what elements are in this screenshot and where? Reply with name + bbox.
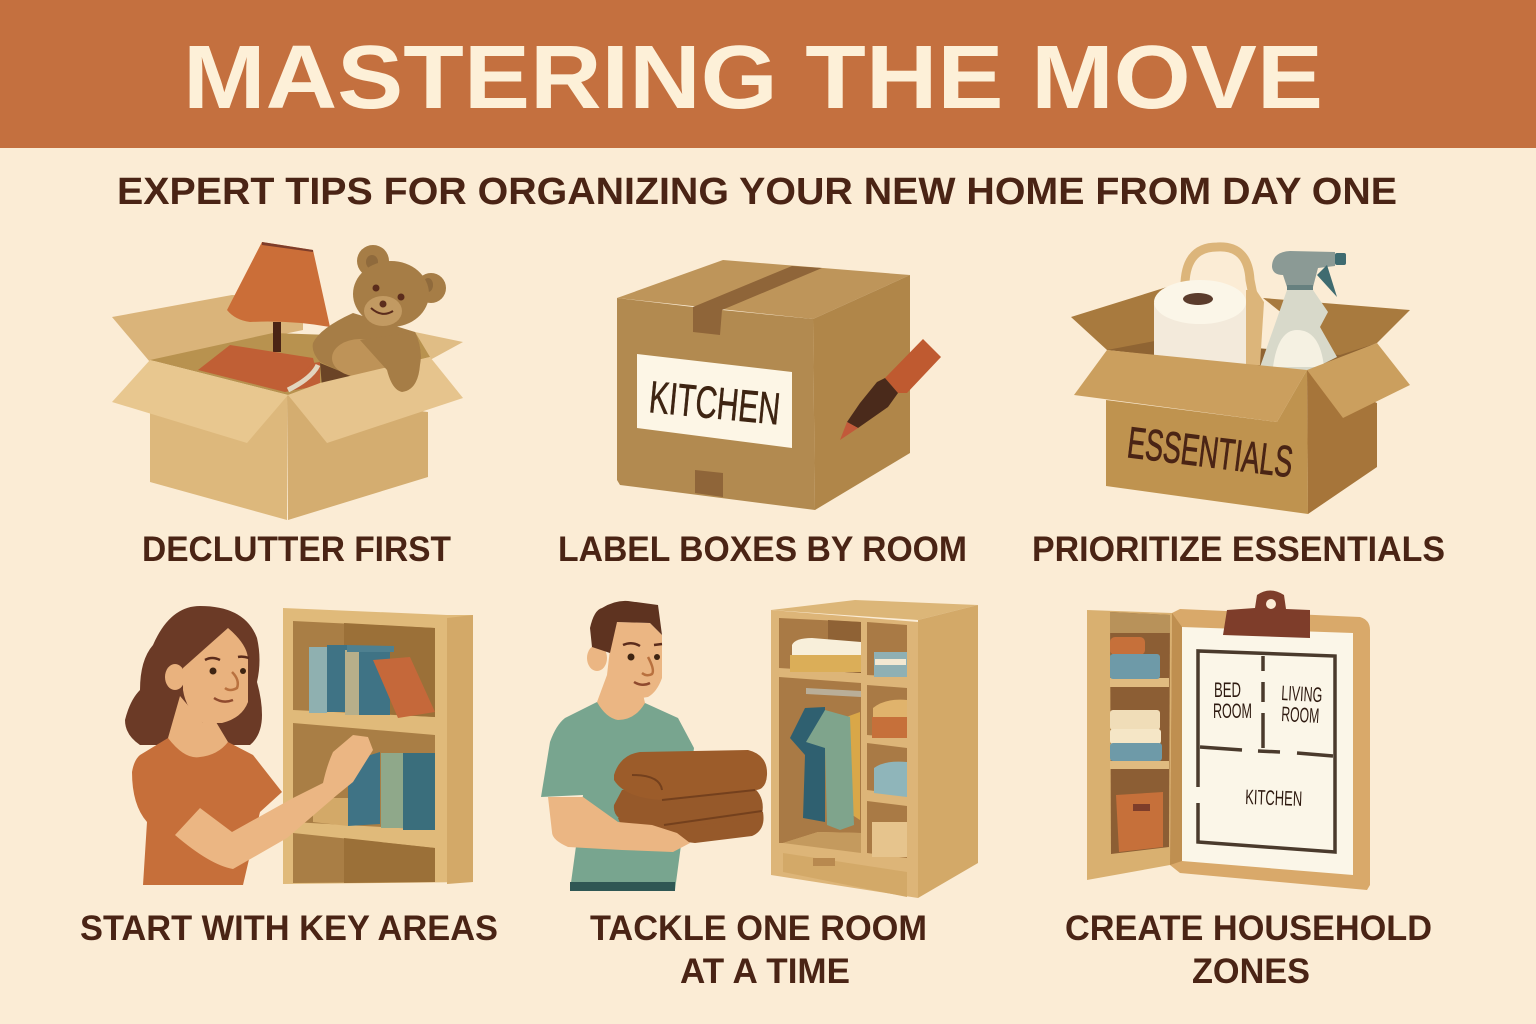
icon: man with towels [541,601,767,891]
box text: ESSENTIALS [1125,418,1296,487]
icon: woman [125,606,373,885]
teddy bear head and arm [353,245,446,392]
panel: tackle one room at a time [541,600,978,991]
label: CREATE HOUSEHOLD [1065,909,1432,948]
panel: start with key areas [80,606,498,948]
box label text: KITCHEN [647,371,782,435]
label: DECLUTTER FIRST [142,530,451,569]
icon: wardrobe [771,600,978,898]
icon: open box with lamp and teddy [112,242,463,520]
icon: clipboard with floor plan [1170,590,1370,890]
subtitle: EXPERT TIPS FOR ORGANIZING YOUR NEW HOME FROM DAY ONE [117,171,1397,213]
panel: prioritize essentials [1032,247,1445,569]
label: TACKLE ONE ROOM [590,909,927,948]
teddy bear body [313,313,421,377]
folded towels [614,750,767,843]
label: PRIORITIZE ESSENTIALS [1032,530,1445,569]
hanging clothes [790,707,860,830]
icon: essentials box [1071,247,1410,514]
lamp shade [227,242,330,327]
blanket [198,345,320,392]
floor plan labels [1213,679,1323,811]
icon: marker [840,339,941,440]
label: LABEL BOXES BY ROOM [558,530,967,569]
floor plan labels: ROOM [1281,703,1320,728]
toilet roll [1154,280,1246,365]
panel: create household zones [1065,590,1432,991]
arm [548,797,690,852]
label [1065,909,1432,991]
icon: cabinet [1087,610,1172,880]
panel: declutter first [112,242,463,569]
label: ZONES [1192,952,1310,991]
label: START WITH KEY AREAS [80,909,498,948]
books [309,645,435,830]
floor plan labels: LIVING [1281,682,1323,707]
icon: taped box with kitchen label and marker [617,260,941,510]
title banner [0,0,1536,148]
panel: label boxes by room [558,260,967,569]
floor plan labels: KITCHEN [1245,786,1303,811]
label [590,909,927,991]
spray bottle [1260,251,1346,372]
floor plan labels: BED [1214,679,1241,702]
title: MASTERING THE MOVE [183,28,1323,128]
floor plan labels: ROOM [1213,700,1252,723]
handle [1185,247,1254,300]
label: AT A TIME [680,952,850,991]
icon: bookshelf [283,608,473,884]
